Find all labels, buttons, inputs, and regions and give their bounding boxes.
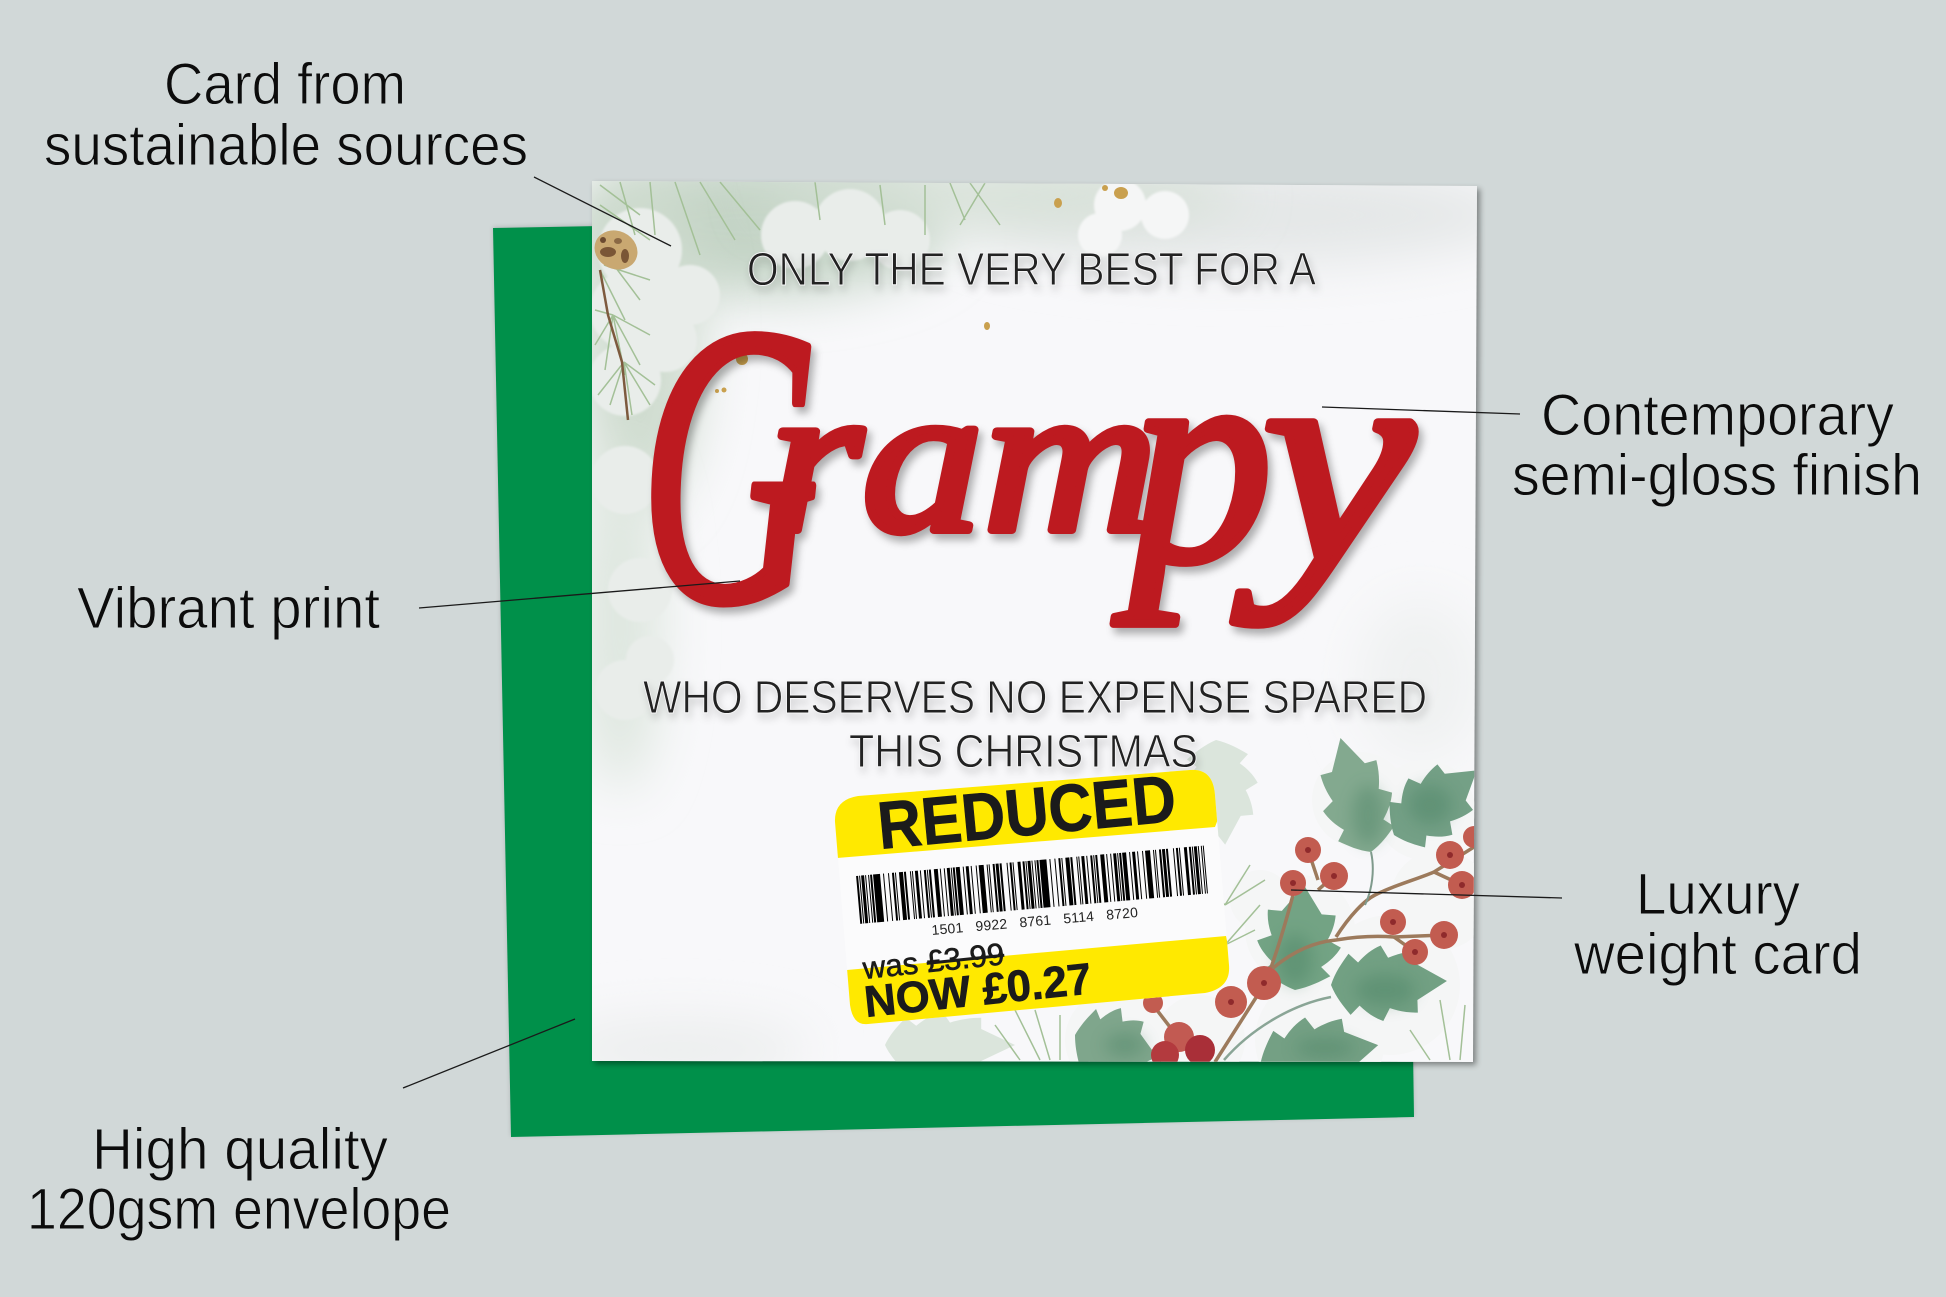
- card line: who deserves: WHO DESERVES NO EXPENSE SPARED: [643, 671, 1427, 723]
- card line: only the very best: ONLY THE VERY BEST FOR A: [747, 243, 1316, 295]
- pale holly leaves: [885, 737, 1263, 1079]
- label: card from sustainable sources: [44, 52, 528, 178]
- label: luxury weight card: [1573, 862, 1862, 987]
- label: high quality envelope: 120gsm envelope: [27, 1177, 451, 1242]
- label: contemporary semi-gloss finish: Contemporary: [1541, 383, 1894, 448]
- label: luxury weight card: weight card: [1573, 922, 1862, 987]
- label: luxury weight card: Luxury: [1636, 862, 1800, 927]
- leader line: vibrant print: [419, 581, 740, 608]
- label: card from sustainable sources: Card from: [164, 52, 406, 117]
- label: high quality envelope: [27, 1117, 451, 1242]
- label: card from sustainable sources: sustainable sources: [44, 113, 528, 178]
- sticker body: [835, 770, 1229, 1024]
- watercolour foliage background: [592, 181, 1477, 1062]
- label: contemporary semi-gloss finish: semi-gloss finish: [1512, 443, 1922, 508]
- green envelope: [493, 226, 1414, 1137]
- script name: Grampy: G: [640, 243, 819, 687]
- new price: NOW £0.27: [862, 954, 1094, 1027]
- label: vibrant print: Vibrant print: [77, 576, 380, 641]
- holly branches: [1153, 847, 1474, 1062]
- leader line: luxury weight card: [1291, 890, 1562, 898]
- label: high quality envelope: High quality: [92, 1117, 388, 1182]
- card paper: [592, 181, 1477, 1062]
- leader line: envelope: [403, 1019, 575, 1088]
- script name: Grampy: [640, 243, 1417, 687]
- reduced sticker: [834, 770, 1230, 1024]
- leaf watercolour shading: [1105, 785, 1452, 1058]
- gold flecks: [715, 185, 1128, 393]
- holly berries: [1143, 826, 1485, 1069]
- sticker heading: REDUCED: [874, 761, 1179, 864]
- leader line: sustainable sources: [534, 177, 671, 246]
- pine needles: [595, 182, 1465, 1060]
- pine branch: [600, 270, 628, 420]
- sticker yellow bands: [834, 770, 1230, 1024]
- barcode digits: 1501 9922 8761 5114 8720: [931, 904, 1139, 938]
- script name: Grampy: p: [1112, 293, 1272, 626]
- holly leaves: [1075, 738, 1474, 1062]
- old price: was £3.99: [860, 936, 1006, 986]
- greeting card: [592, 180, 1484, 1068]
- barcode: [858, 869, 1206, 900]
- card line: this christmas: THIS CHRISTMAS: [849, 725, 1198, 777]
- leader line: semi-gloss finish: [1322, 407, 1520, 414]
- script name: Grampy: y: [1230, 293, 1417, 626]
- script name: Grampy: ram: [768, 338, 1158, 577]
- white halo behind holly: [1070, 801, 1474, 1062]
- icon: pine cone: [594, 230, 638, 270]
- holly sprig: [1075, 738, 1474, 1062]
- label: contemporary semi-gloss finish: [1512, 383, 1922, 508]
